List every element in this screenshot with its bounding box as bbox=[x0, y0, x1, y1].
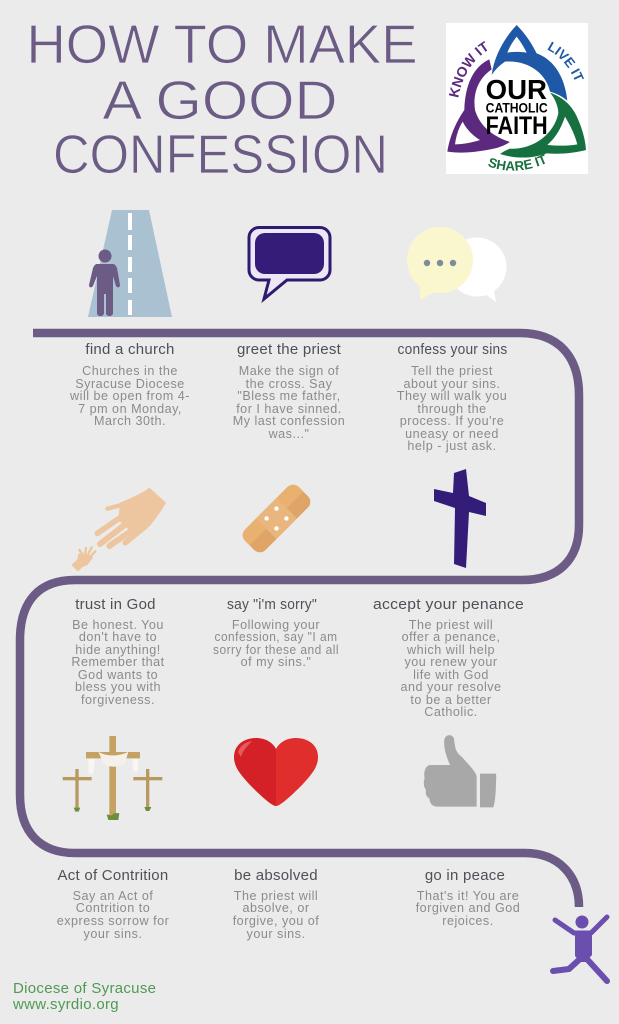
step: greet the priest: was..." bbox=[268, 427, 309, 441]
step: be absolved: be absolved bbox=[234, 867, 318, 884]
step: say i'm sorry: of my sins." bbox=[241, 655, 311, 669]
icon: jumping figure bbox=[553, 916, 607, 981]
step: confess your sins: uneasy or need bbox=[405, 427, 499, 441]
logo: purple arc bbox=[447, 59, 510, 153]
step: find a church: March 30th. bbox=[94, 414, 166, 428]
step: accept your penance: offer a penance, bbox=[402, 630, 500, 644]
step: say i'm sorry: confession, say "I am bbox=[214, 630, 338, 644]
icon: road with person bbox=[88, 210, 172, 317]
step: go in peace: That's it! You are bbox=[417, 889, 519, 903]
step: trust in God: Remember that bbox=[71, 655, 165, 669]
title bbox=[26, 13, 418, 185]
icon: speech bubble bbox=[249, 228, 330, 299]
step: trust in God: forgiveness. bbox=[81, 693, 155, 707]
step: greet the priest: My last confession bbox=[233, 414, 345, 428]
step: trust in God: Be honest. You bbox=[72, 618, 164, 632]
step: greet the priest: for I have sinned. bbox=[236, 402, 342, 416]
step: confess your sins: confess your sins bbox=[398, 341, 508, 358]
footer: diocese credit: Diocese of Syracuse bbox=[13, 980, 156, 997]
icon: chat bubbles bbox=[407, 227, 506, 302]
step: accept your penance bbox=[373, 596, 524, 719]
step: confess your sins: about your sins. bbox=[404, 377, 500, 391]
logo: wordmark: CATHOLIC bbox=[486, 101, 548, 116]
logo: blue arc bbox=[492, 25, 567, 101]
step: Act of Contrition: express sorrow for bbox=[57, 914, 169, 928]
step: accept your penance: Catholic. bbox=[424, 705, 478, 719]
step: greet the priest: Make the sign of bbox=[239, 364, 339, 378]
step: say i'm sorry: say "i'm sorry" bbox=[227, 596, 317, 613]
logo: know it: KNOW IT bbox=[449, 41, 488, 98]
step: greet the priest: "Bless me father, bbox=[237, 389, 341, 403]
step: be absolved: forgive, you of bbox=[233, 914, 319, 928]
step: Act of Contrition: Act of Contrition bbox=[58, 867, 168, 884]
step: accept your penance: accept your penance bbox=[373, 596, 524, 613]
step: find a church: Churches in the bbox=[82, 364, 178, 378]
step: confess your sins: They will walk you bbox=[397, 389, 507, 403]
step: say i'm sorry bbox=[213, 596, 339, 669]
step: be absolved bbox=[233, 867, 319, 941]
logo: wordmark: FAITH bbox=[486, 112, 548, 140]
step: greet the priest: the cross. Say bbox=[246, 377, 333, 391]
step: greet the priest bbox=[233, 341, 345, 441]
icon: hands reaching bbox=[71, 488, 166, 572]
icon: heart bbox=[234, 738, 318, 806]
logo: share it: SHARE IT bbox=[488, 154, 545, 171]
step: confess your sins: process. If you're bbox=[400, 414, 504, 428]
step: greet the priest: greet the priest bbox=[237, 341, 342, 358]
step: Act of Contrition bbox=[57, 867, 169, 941]
step: be absolved: absolve, or bbox=[242, 901, 310, 915]
step: accept your penance: you renew your bbox=[404, 655, 498, 669]
step: confess your sins: through the bbox=[417, 402, 487, 416]
icon: three crosses bbox=[63, 736, 162, 820]
icon: bandage bbox=[239, 481, 314, 556]
step: find a church: 7 pm on Monday, bbox=[78, 402, 182, 416]
step: trust in God bbox=[71, 596, 165, 707]
step: find a church bbox=[69, 341, 190, 428]
footer: diocese credit bbox=[12, 980, 156, 1013]
title: A GOOD bbox=[102, 69, 338, 131]
step: Act of Contrition: Contrition to bbox=[76, 901, 150, 915]
title: HOW TO MAKE bbox=[26, 13, 418, 75]
logo: live it: LIVE IT bbox=[548, 42, 584, 80]
footer: diocese credit: www.syrdio.org bbox=[12, 996, 119, 1013]
step: accept your penance: which will help bbox=[406, 643, 495, 657]
step: accept your penance: The priest will bbox=[409, 618, 493, 632]
step: trust in God: trust in God bbox=[75, 596, 156, 613]
step: say i'm sorry: sorry for these and all bbox=[213, 643, 339, 657]
step: confess your sins: Tell the priest bbox=[411, 364, 493, 378]
logo: wordmark: OUR bbox=[486, 74, 547, 105]
step: find a church: will be open from 4- bbox=[69, 389, 190, 403]
step: trust in God: God wants to bbox=[78, 668, 158, 682]
step: be absolved: your sins. bbox=[247, 927, 305, 941]
step: go in peace: go in peace bbox=[425, 867, 505, 884]
step: go in peace: forgiven and God bbox=[416, 901, 520, 915]
step: accept your penance: to be a better bbox=[410, 693, 492, 707]
logo: green arc bbox=[500, 93, 586, 158]
icon: thumbs up bbox=[424, 735, 496, 807]
step: accept your penance: life with God bbox=[413, 668, 489, 682]
step: confess your sins bbox=[397, 341, 508, 453]
step: say i'm sorry: Following your bbox=[232, 618, 320, 632]
step: find a church: find a church bbox=[85, 341, 175, 358]
step: Act of Contrition: your sins. bbox=[84, 927, 142, 941]
step: go in peace: rejoices. bbox=[442, 914, 494, 928]
logo: Our Catholic Faith bbox=[446, 23, 588, 174]
step: find a church: Syracuse Diocese bbox=[75, 377, 185, 391]
step: go in peace bbox=[416, 867, 520, 928]
logo: wordmark bbox=[486, 74, 548, 140]
title: CONFESSION bbox=[53, 123, 388, 185]
step: trust in God: hide anything! bbox=[75, 643, 161, 657]
step: trust in God: don't have to bbox=[79, 630, 157, 644]
step: Act of Contrition: Say an Act of bbox=[73, 889, 153, 903]
step: accept your penance: and your resolve bbox=[400, 680, 502, 694]
icon: purple cross bbox=[434, 469, 486, 568]
step: confess your sins: help - just ask. bbox=[407, 439, 497, 453]
step: be absolved: The priest will bbox=[234, 889, 318, 903]
winding path line bbox=[20, 333, 579, 907]
step: trust in God: bless you with bbox=[75, 680, 161, 694]
